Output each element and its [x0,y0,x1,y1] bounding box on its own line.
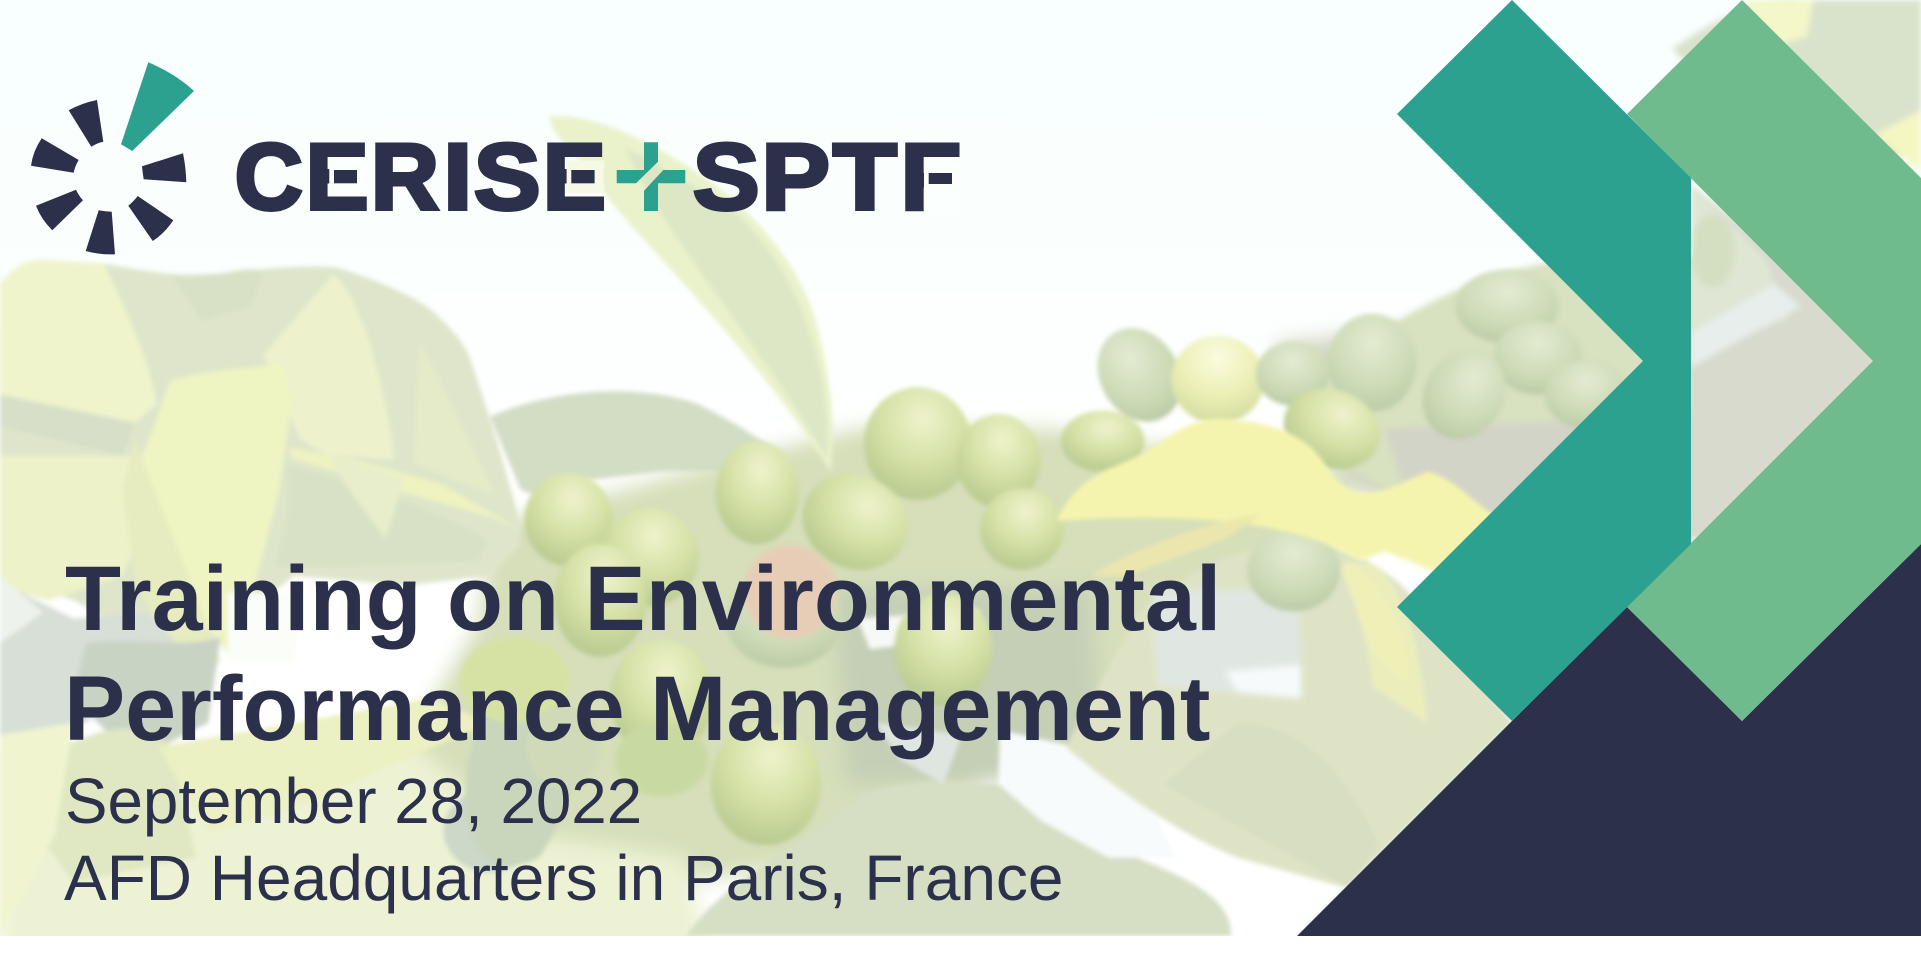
title: Training on Environmental [65,548,1221,650]
wordmark: T [833,125,897,230]
wordmark: E [543,124,606,229]
wordmark plus sign [617,142,685,211]
upper centre leaf [549,116,833,472]
wordmark: E [306,124,369,229]
wordmark letter counters and notches [329,160,960,212]
event date and location: AFD Headquarters in Paris, France [64,842,1064,914]
wordmark: F [901,125,961,229]
wordmark: I [443,124,472,229]
sky gaps between branch elements [996,730,1136,860]
large left leaf [0,116,1513,936]
dark leaf behind berries [490,391,784,496]
wordmark: P [762,124,830,229]
soft shadow masses behind the branch [0,326,1389,936]
logo: CERISE+SPTF [31,62,961,254]
bottom leaf [686,781,1231,936]
wordmark: R [371,124,439,229]
lower-right leaf [1066,543,1513,888]
wordmark [235,124,961,230]
upper-right foliage [1360,0,1921,543]
wordmark: S [693,124,759,229]
blue-grey gap right of title [1152,590,1301,698]
wordmark: S [474,124,540,229]
mid-left dark leaves [0,593,175,736]
pale yellow foreground leaf [142,366,290,654]
title [64,548,1221,760]
teal chevron [1397,0,1691,721]
berries [459,270,1628,845]
logo burst icon [31,62,194,254]
event date and location: September 28, 2022 [65,766,642,837]
wordmark: C [235,124,303,229]
title: Performance Management [64,658,1210,760]
ripening red berry [744,545,837,638]
light green chevron [1627,0,1921,721]
navy triangle [1297,544,1921,936]
event date and location [64,766,1064,914]
blue-grey berry shadow [442,796,513,874]
yellow leaf [1056,418,1492,600]
